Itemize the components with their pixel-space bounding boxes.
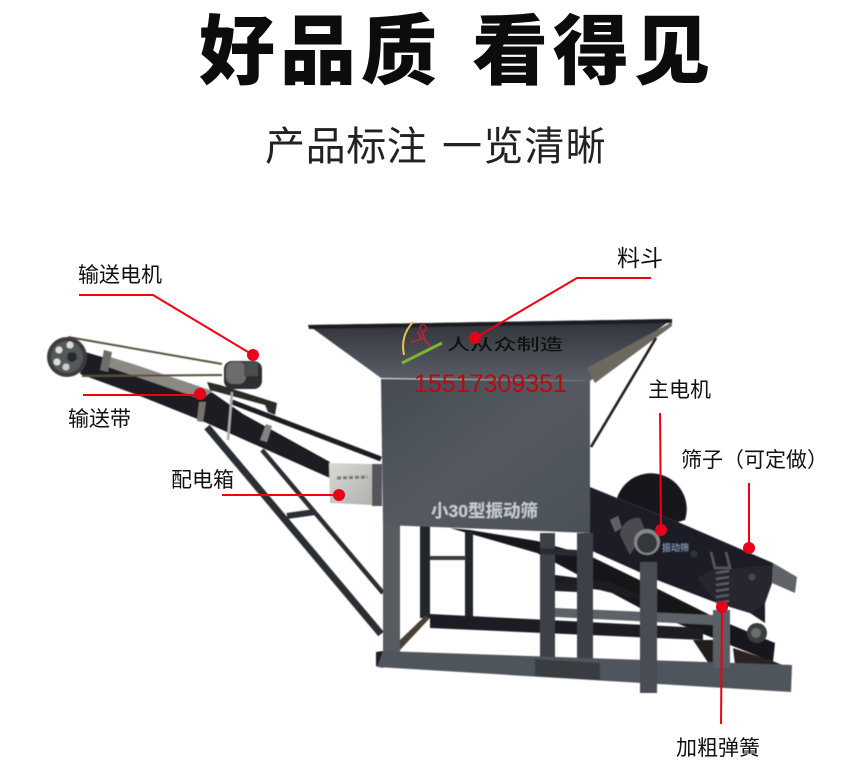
callout: 筛子（可定做） [681, 449, 828, 554]
frame [376, 525, 792, 693]
spring [711, 552, 730, 603]
logo [402, 322, 563, 363]
lower pulley [747, 623, 767, 643]
subtitle: 产品标注 [265, 125, 427, 169]
callout: 加粗弹簧: 加粗弹簧 [676, 737, 760, 760]
callout: 配电箱 [171, 469, 345, 501]
distribution box [329, 463, 382, 506]
callout: 料斗: 料斗 [617, 245, 663, 271]
logo: 人从众制造 [447, 336, 563, 354]
callout: 筛子（可定做）: 筛子（可定做） [681, 449, 828, 472]
callout: 输送带 [68, 388, 206, 431]
screen body [590, 487, 797, 623]
main body [381, 379, 590, 533]
lower rails [450, 528, 790, 672]
body label: 小30型振动筛 [431, 501, 538, 521]
callout: 配电箱: 配电箱 [171, 469, 234, 492]
screen disc [617, 473, 687, 522]
callout: 料斗 [469, 245, 663, 344]
phone number: 15517309351 [414, 370, 567, 398]
callout: 主电机 [648, 379, 711, 536]
subtitle [265, 125, 607, 169]
subtitle: 一览清晰 [442, 125, 607, 169]
vibration motor [610, 516, 756, 580]
hopper [308, 319, 672, 447]
title [199, 10, 715, 95]
vibration motor: 振动筛 [662, 542, 689, 553]
callout: 输送带: 输送带 [68, 408, 131, 431]
callout: 输送电机: 输送电机 [78, 264, 162, 287]
callout: 主电机: 主电机 [648, 379, 711, 402]
title: 好品质 [199, 10, 442, 95]
conveyor pulley [47, 337, 87, 377]
belt [68, 337, 222, 376]
machine illustration [47, 319, 797, 693]
title: 看得见 [472, 10, 715, 95]
callout: 输送电机 [78, 264, 259, 361]
conveyor frame [80, 350, 381, 478]
conveyor support ladder [207, 427, 383, 634]
conveyor motor [224, 361, 262, 389]
callout: 加粗弹簧 [676, 601, 760, 760]
